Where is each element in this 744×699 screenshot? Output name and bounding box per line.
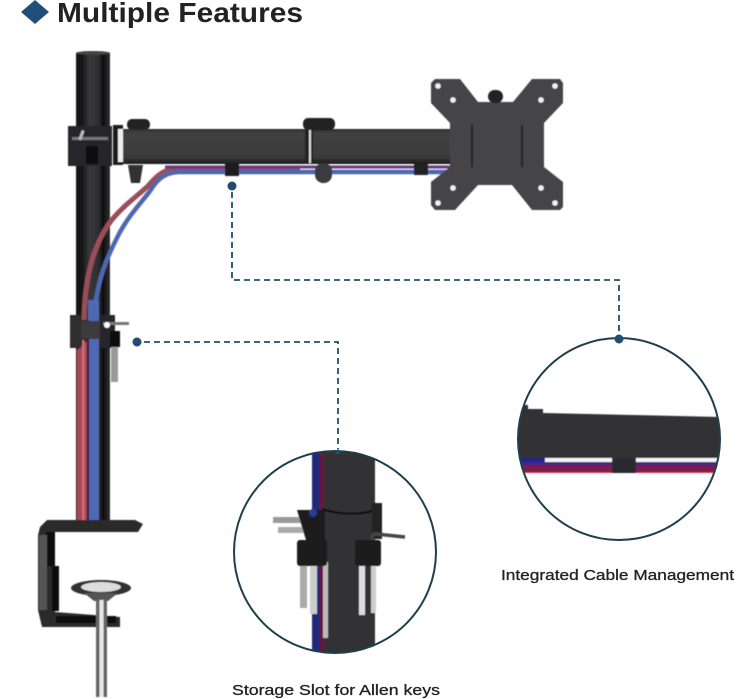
label: storage slot for allen keys: Storage Slot for Allen keys (232, 682, 440, 699)
vertical pole (76, 51, 110, 521)
clamp screw (71, 580, 131, 697)
left allen keys (273, 509, 328, 638)
magnified pole (324, 450, 375, 654)
lower cables on pole (77, 300, 99, 521)
pole collar (68, 126, 112, 166)
label: integrated cable management: Integrated Cable Management (501, 567, 735, 584)
collar gap (322, 509, 376, 514)
right allen keys (355, 503, 405, 615)
cable clip (225, 164, 239, 176)
panel: storage slot detail (234, 450, 436, 654)
panel: integrated cable management detail (515, 334, 722, 540)
magnified cables (312, 450, 324, 654)
callout connector: cable management (228, 182, 619, 335)
monitor arm illustration (38, 51, 563, 697)
cable clip near plate (414, 164, 428, 175)
joint (113, 119, 150, 183)
icon: diamond bullet (21, 0, 49, 24)
magnified arm (515, 405, 722, 458)
horizontal arm (123, 129, 450, 164)
desk clamp (38, 520, 143, 627)
title (21, 0, 303, 28)
VESA mount plate (431, 79, 563, 210)
callout connector: storage slot (132, 338, 338, 449)
magnified clip (612, 458, 636, 473)
cables from arm to pole (84, 167, 450, 320)
storage slot clip (70, 315, 129, 382)
arm segment joint (303, 118, 335, 183)
magnified cables (515, 458, 722, 473)
